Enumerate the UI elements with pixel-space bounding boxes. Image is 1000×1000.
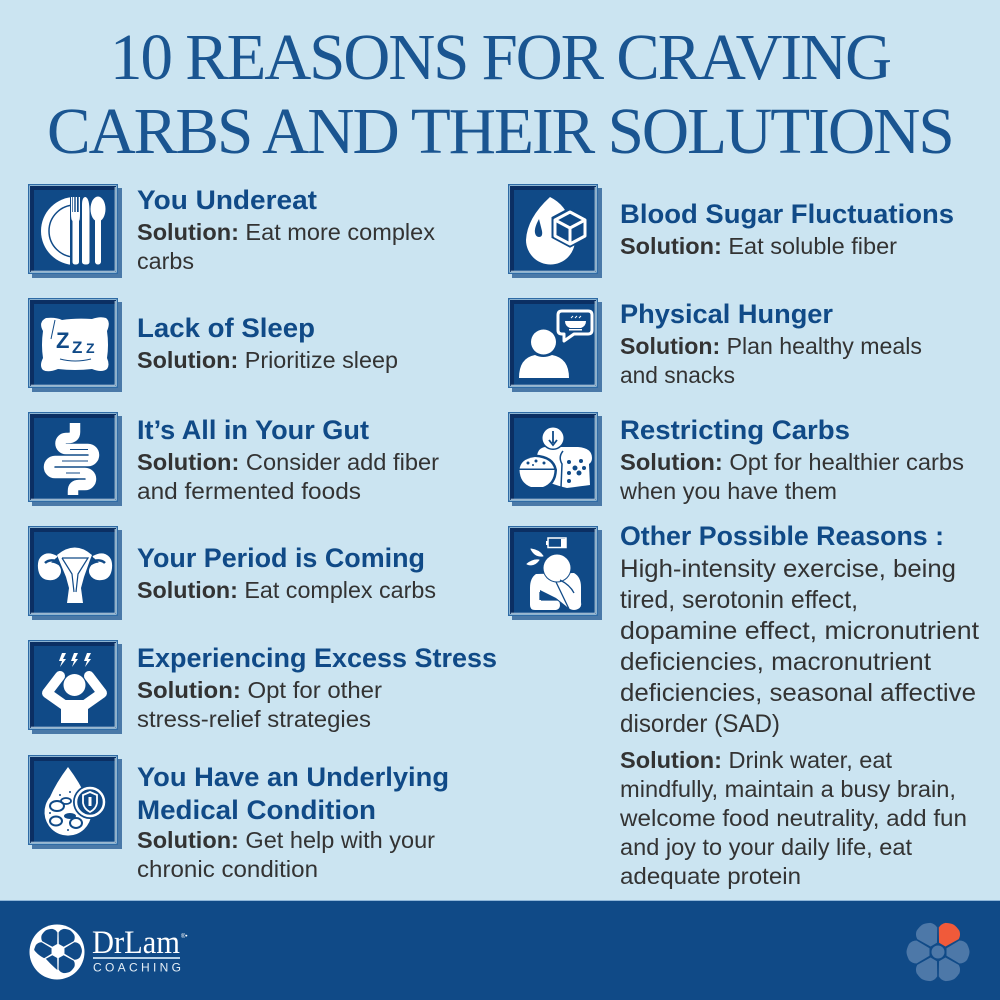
- solution text: and joy to your daily life, eat: [620, 834, 913, 860]
- icon: pillow with zzz: Z: [72, 338, 82, 357]
- solution text: Solution: Eat more complex: [137, 219, 435, 245]
- solution text: [619, 747, 967, 889]
- solution text: Solution: Eat complex carbs: [137, 577, 436, 603]
- panel: physical hunger: [509, 299, 922, 392]
- solution text: and fermented foods: [137, 478, 361, 504]
- panel: restricting carbs: [509, 413, 964, 506]
- reasons list: tired, serotonin effect,: [620, 586, 858, 614]
- panel: underlying medical condition: [29, 756, 449, 882]
- reasons list: [620, 555, 979, 738]
- icon: pillow with zzz: Z: [86, 340, 95, 356]
- icon: stressed person: [29, 641, 122, 734]
- heading: Other Possible Reasons :: [620, 521, 944, 551]
- footer band: [0, 900, 1000, 1000]
- heading: Physical Hunger: [620, 299, 833, 329]
- heading: Medical Condition: [137, 795, 376, 825]
- heading: Restricting Carbs: [620, 415, 850, 445]
- solution text: [137, 827, 435, 882]
- solution text: Solution: Drink water, eat: [620, 747, 893, 773]
- solution text: adequate protein: [620, 863, 801, 889]
- panel: lack of sleep: [29, 299, 398, 392]
- panel: experiencing excess stress: [29, 641, 497, 734]
- reasons list: deficiencies, seasonal affective: [620, 679, 976, 707]
- reasons list: dopamine effect, micronutrient: [620, 617, 979, 645]
- icon: pillow with zzz: Z: [56, 328, 69, 353]
- solution text: stress-relief strategies: [137, 706, 371, 732]
- logo: DrLam Coaching: [30, 924, 188, 980]
- title: CARBS AND THEIR SOLUTIONS: [47, 95, 953, 168]
- heading: You Have an Underlying: [137, 762, 449, 792]
- icon: intestines: [29, 413, 122, 506]
- solution text: chronic condition: [137, 856, 318, 882]
- heading: [137, 762, 449, 825]
- panel: other possible reasons: [509, 521, 979, 889]
- panel: blood sugar fluctuations: [509, 185, 954, 278]
- title: [47, 22, 953, 168]
- solution text: mindfully, maintain a busy brain,: [620, 776, 956, 802]
- icon: flower mark with orange petal: [906, 919, 970, 985]
- solution text: [137, 219, 435, 274]
- icon: blood drop with shield: [29, 756, 122, 849]
- logo: DrLam Coaching: DrLam: [92, 925, 180, 961]
- heading: Experiencing Excess Stress: [137, 643, 497, 673]
- solution text: carbs: [137, 248, 194, 274]
- reasons list: High-intensity exercise, being: [620, 555, 956, 583]
- solution text: Solution: Consider add fiber: [137, 449, 439, 475]
- panel: it's all in your gut: [29, 413, 439, 506]
- heading: Your Period is Coming: [137, 543, 425, 573]
- reasons list: disorder (SAD): [620, 710, 780, 738]
- icon: plate and cutlery: [29, 185, 122, 278]
- solution text: [137, 449, 439, 504]
- solution text: and snacks: [620, 362, 735, 388]
- solution text: Solution: Opt for healthier carbs: [620, 449, 964, 475]
- solution text: Solution: Prioritize sleep: [137, 347, 398, 373]
- icon: drop with sugar cube: [509, 185, 602, 278]
- solution text: welcome food neutrality, add fun: [619, 805, 967, 831]
- solution text: Solution: Get help with your: [137, 827, 435, 853]
- heading: Lack of Sleep: [137, 313, 315, 343]
- panel: your period is coming: [29, 527, 436, 620]
- heading: You Undereat: [137, 185, 317, 215]
- solution text: [137, 677, 382, 732]
- icon: person with food speech bubble: [509, 299, 602, 392]
- solution text: when you have them: [619, 478, 837, 504]
- heading: It’s All in Your Gut: [137, 415, 369, 445]
- solution text: [620, 333, 922, 388]
- icon: uterus: [29, 527, 122, 620]
- logo: DrLam Coaching: COACHING: [93, 960, 181, 974]
- solution text: Solution: Plan healthy meals: [620, 333, 922, 359]
- icon: bread, bowl and down arrow: [509, 413, 602, 506]
- panel: you undereat: [29, 185, 435, 278]
- icon: tired person with low battery: [509, 527, 602, 620]
- heading: Blood Sugar Fluctuations: [620, 199, 954, 229]
- logo: DrLam Coaching: ®•: [181, 933, 188, 940]
- title: 10 REASONS FOR CRAVING: [110, 22, 891, 94]
- solution text: [619, 449, 964, 504]
- solution text: Solution: Eat soluble fiber: [620, 233, 897, 259]
- solution text: Solution: Opt for other: [137, 677, 382, 703]
- reasons list: deficiencies, macronutrient: [620, 648, 931, 676]
- icon: pillow with zzz: [29, 299, 122, 392]
